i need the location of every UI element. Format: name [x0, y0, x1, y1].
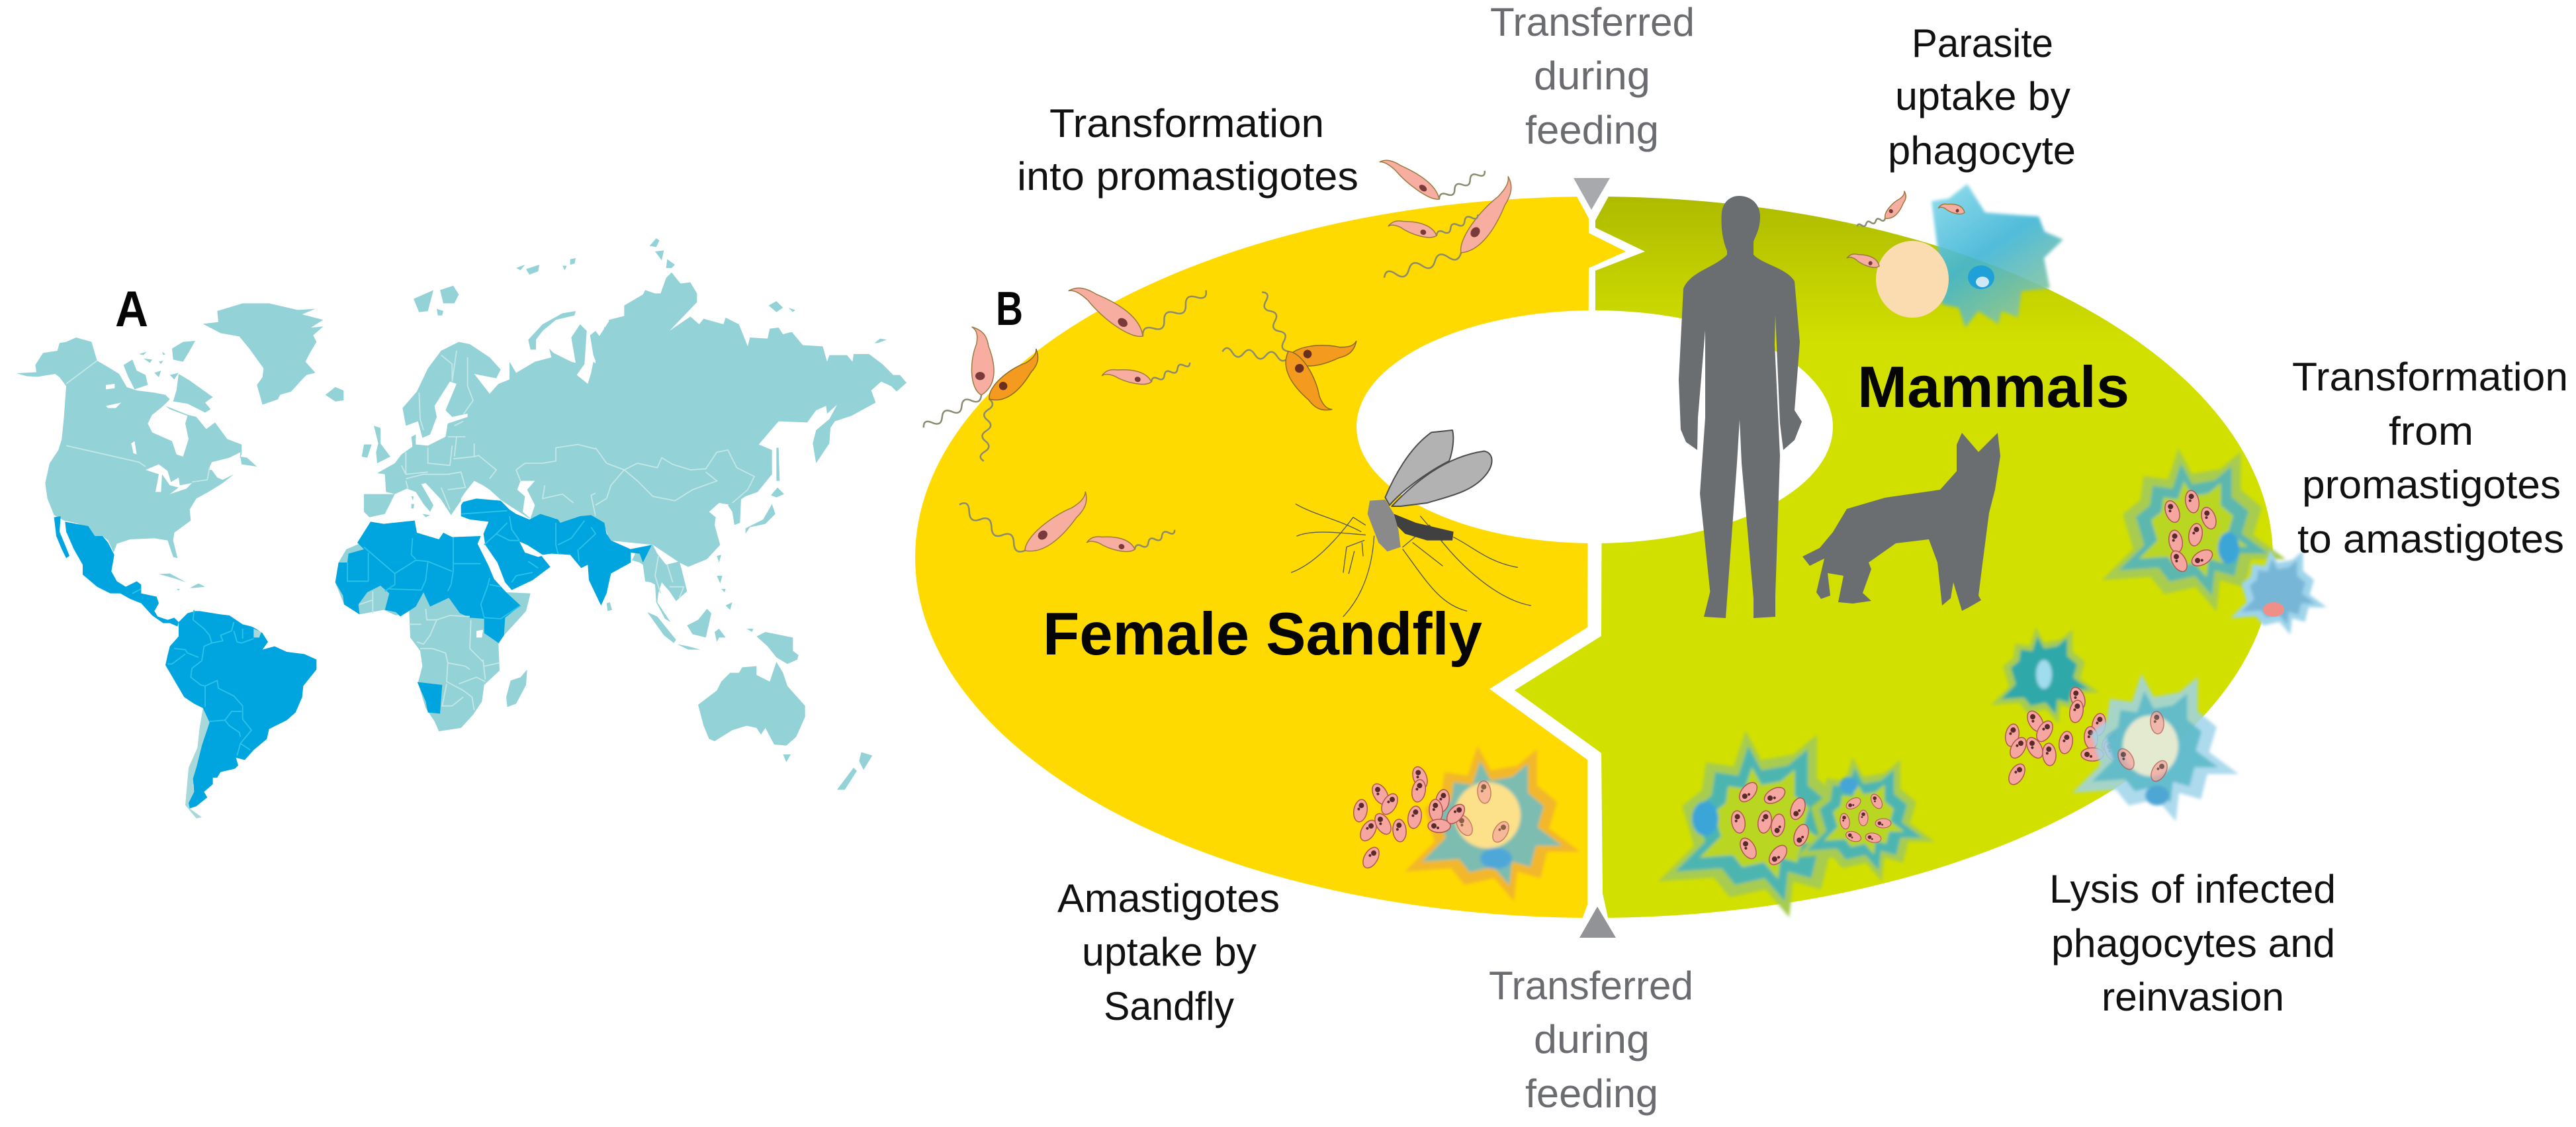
map: Eurasia west	[362, 258, 629, 529]
label: lysis of infected phagocytes and reinvasion: Lysis of infected	[2049, 867, 2336, 911]
map: Southeast Asia and Oceania	[630, 545, 872, 789]
map: Americas endemic	[54, 516, 316, 819]
arrow: bottom transfer	[1579, 907, 1616, 938]
label: lysis of infected phagocytes and reinvasion: phagocytes and	[2051, 921, 2335, 966]
label: transformation from promastigotes to amastigotes: promastigotes	[2302, 463, 2561, 507]
label: transformation into promastigotes: into promastigotes	[1017, 154, 1358, 199]
map: North America and Greenland	[17, 303, 343, 558]
borders, Africa and Middle East	[359, 591, 500, 710]
inland waters, North America	[106, 384, 240, 494]
label: transformation from promastigotes to amastigotes: from	[2389, 409, 2473, 453]
ring: mammals half	[1515, 197, 2273, 918]
panel B: life cycle ring	[915, 178, 2273, 938]
icon: large infected cell bottom	[1658, 731, 1869, 917]
label: parasite uptake by phagocyte: phagocyte	[1888, 128, 2076, 173]
arrow: top transfer	[1574, 178, 1610, 210]
Caspian Sea	[517, 481, 535, 518]
panel A: world map	[17, 238, 907, 819]
French Guiana	[253, 629, 261, 637]
label: transferred during feeding, top: Transferred	[1490, 0, 1695, 44]
icon: infected cell, transformation	[2102, 448, 2286, 611]
ring: female sandfly half	[915, 197, 1626, 918]
map: Eurasia east	[596, 238, 907, 567]
map: endemic Africa	[335, 521, 521, 643]
label: transferred during feeding, top: during	[1534, 54, 1650, 98]
icon: dog silhouette	[1802, 433, 2000, 611]
promastigotes group	[922, 152, 1524, 559]
icon: phagocyte uptake	[1847, 184, 2063, 328]
icon: amastigote uptake cell, sandfly side	[1405, 746, 1580, 901]
label: amastigotes uptake by sandfly	[1057, 876, 1280, 1028]
map: Namibia	[418, 682, 442, 713]
label: transformation into promastigotes: Transformation	[1049, 101, 1324, 146]
label: transferred during feeding, bottom: Transferred	[1489, 964, 1693, 1008]
icon: small infected cell at rim	[2230, 549, 2327, 635]
label: amastigotes uptake by sandfly: Sandfly	[1104, 984, 1234, 1028]
sandfly abdomen	[1392, 514, 1454, 541]
label: transferred during feeding, bottom: feeding	[1525, 1071, 1658, 1116]
icon: teal cell	[1990, 627, 2100, 723]
borders, North America	[66, 361, 210, 482]
icon: amastigotes released, mammals	[2004, 686, 2123, 788]
label: transferred during feeding, bottom: during	[1534, 1017, 1650, 1061]
sandfly wings	[1385, 430, 1492, 506]
label: lysis of infected phagocytes and reinvasion	[2049, 867, 2336, 1019]
label: transformation from promastigotes to amastigotes	[2292, 355, 2568, 561]
label: lysis of infected phagocytes and reinvasion: reinvasion	[2102, 975, 2284, 1019]
map: Bangladesh	[630, 545, 652, 563]
icon: lysing cell, mammals	[2072, 674, 2239, 821]
icon: sandfly	[1292, 430, 1531, 617]
borders, Europe and Central Asia	[402, 351, 627, 516]
icon: human silhouette	[1679, 196, 1802, 618]
heading: Female Sandfly: Female Sandfly	[1043, 601, 1482, 668]
sandfly legs	[1292, 504, 1531, 617]
label: transferred during feeding, bottom	[1489, 964, 1693, 1116]
label: amastigotes uptake by sandfly: Amastigotes	[1057, 876, 1280, 921]
map: Africa base	[335, 498, 631, 731]
label: parasite uptake by phagocyte: Parasite	[1912, 21, 2053, 66]
label: transformation from promastigotes to amastigotes: to amastigotes	[2297, 517, 2564, 561]
borders, East Asia	[596, 448, 754, 505]
label: transformation into promastigotes	[1017, 101, 1358, 199]
panel label A: A	[115, 281, 148, 338]
label: transformation from promastigotes to amastigotes: Transformation	[2292, 355, 2568, 399]
label: parasite uptake by phagocyte	[1888, 21, 2076, 173]
icon: amastigotes released, sandfly side	[1352, 765, 1468, 871]
heading: Mammals: Mammals	[1857, 354, 2129, 420]
panel label B: B	[996, 283, 1023, 336]
icon: medium infected cell bottom	[1795, 757, 1935, 881]
label: transferred during feeding, top	[1490, 0, 1695, 152]
label: amastigotes uptake by sandfly: uptake by	[1082, 930, 1257, 974]
map: endemic Middle East and South Asia	[461, 498, 631, 606]
label: parasite uptake by phagocyte: uptake by	[1895, 74, 2070, 118]
borders, Latin America	[132, 589, 253, 756]
sandfly thorax	[1368, 500, 1401, 551]
label: transferred during feeding, top: feeding	[1525, 108, 1659, 152]
